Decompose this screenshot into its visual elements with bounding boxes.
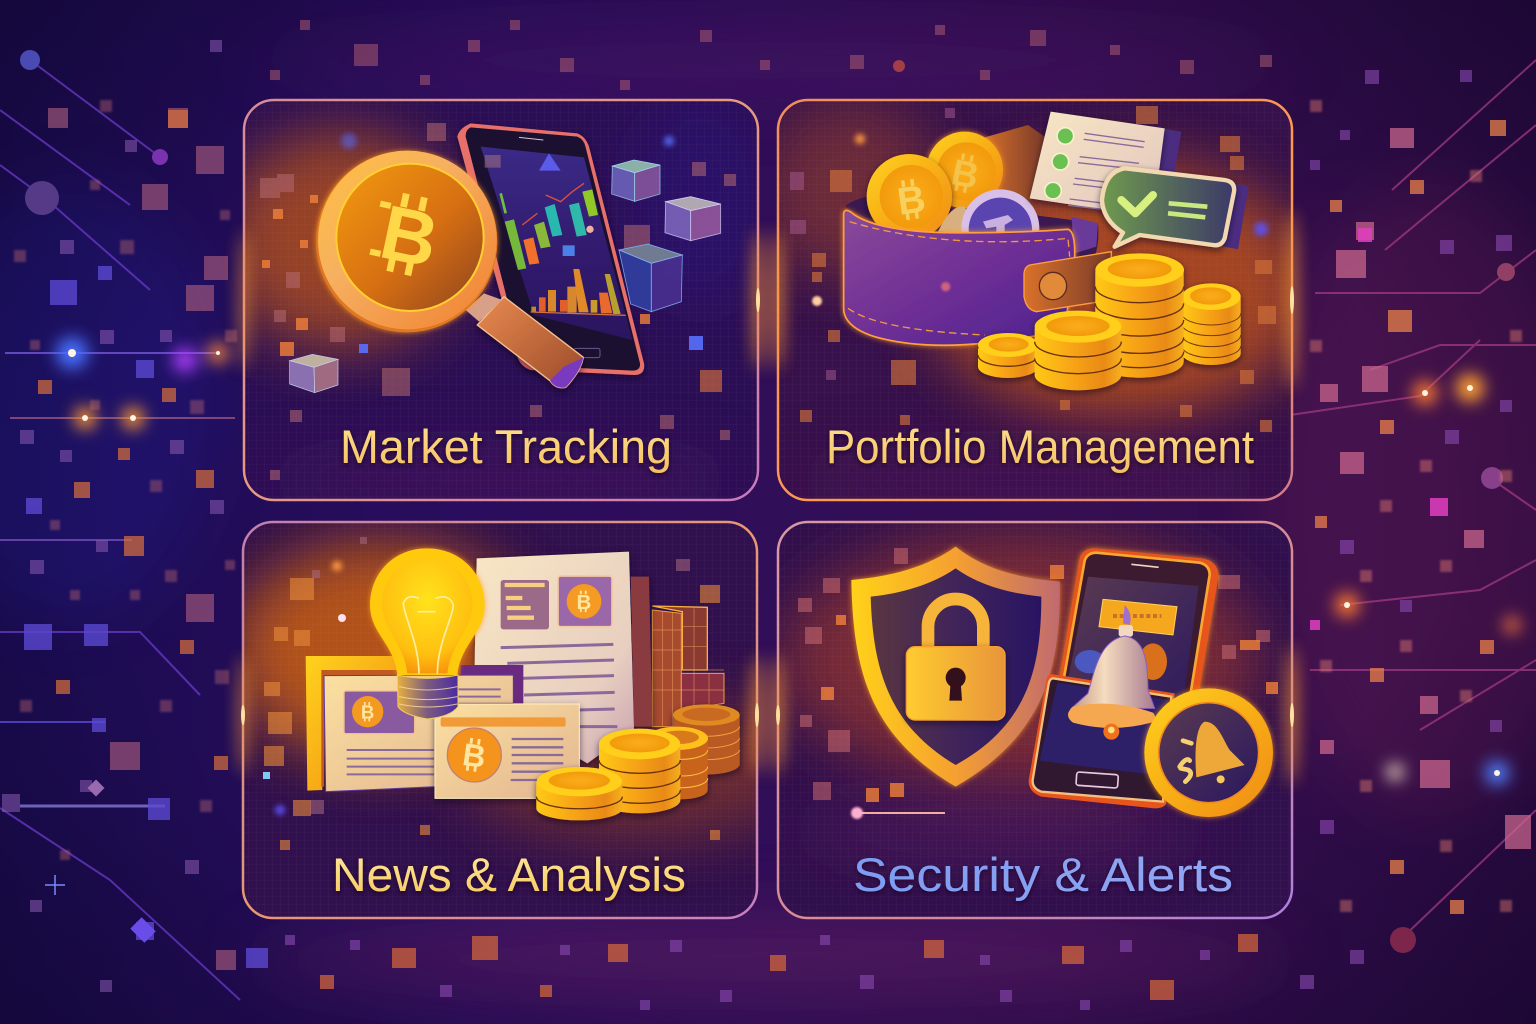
icon: shield with padlock [851, 547, 1060, 787]
heading: market tracking: Market Tracking [340, 420, 672, 473]
heading: news and analysis: News & Analysis [332, 848, 686, 901]
icon: checklist paper [1030, 112, 1181, 217]
icon: light bulb [370, 548, 485, 719]
panel: news and analysis [230, 522, 820, 918]
scattered squares top and bottom [270, 20, 1364, 1010]
border flares [239, 210, 1297, 785]
panel: market tracking [220, 90, 770, 510]
icon: glass cubes [290, 160, 721, 393]
icon: front news card: B [460, 736, 488, 775]
panel: portfolio management [760, 100, 1310, 510]
icon: magnifier with bitcoin: B [373, 190, 445, 284]
panel borders [243, 100, 1292, 918]
icon: wallet back and coins: B [895, 177, 928, 224]
circuit lines left [0, 50, 240, 1000]
icon: wallet back and coins [845, 125, 1098, 267]
icon: left news card [306, 656, 523, 792]
heading: portfolio management: Portfolio Management [826, 420, 1254, 473]
icon: coin stacks [536, 704, 740, 820]
icon: wallet strap [1024, 252, 1111, 312]
icon: chart blocks [652, 606, 724, 727]
icon: wallet front [844, 210, 1075, 345]
scattered squares right [1310, 70, 1531, 914]
icon: magnifier with bitcoin [316, 151, 583, 388]
icon: news illustration [306, 548, 740, 820]
icon: verified speech bubble [1102, 168, 1249, 249]
icon: phone with bell [1029, 548, 1219, 808]
circuit lines right [1290, 60, 1536, 953]
icon: portfolio illustration [844, 112, 1249, 390]
heading: security and alerts: Security & Alerts [853, 848, 1233, 901]
icon: news document: B [577, 591, 591, 614]
icon: news document [474, 552, 652, 763]
icon: wallet back and coins: B [948, 151, 982, 197]
scattered squares left [2, 40, 268, 992]
light flares [45, 337, 1520, 895]
icon: left news card: B [361, 701, 374, 722]
icon: bell badge [1144, 688, 1273, 817]
icon: coin stacks [978, 253, 1241, 390]
icon: security illustration [851, 547, 1273, 817]
icon: front news card [435, 704, 579, 798]
panel: security and alerts [778, 522, 1292, 918]
icon: phone with chart [457, 123, 644, 375]
icon: market tracking illustration [290, 123, 721, 393]
